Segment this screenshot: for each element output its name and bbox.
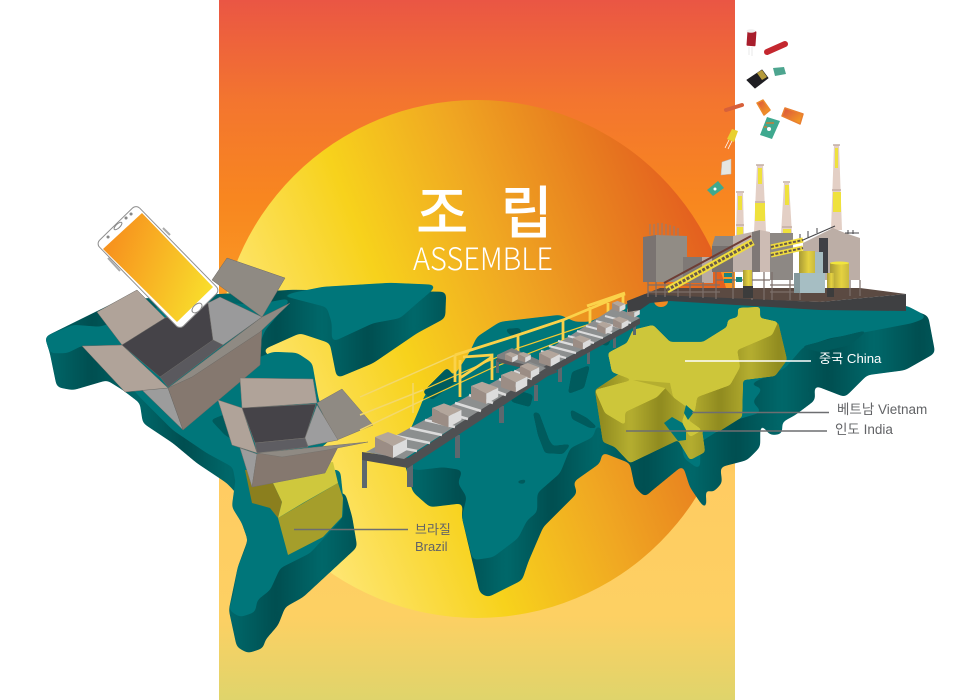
front flap [257, 442, 368, 457]
brazil text: 브라질 [415, 522, 451, 537]
background panel [219, 0, 735, 700]
phone screen [103, 213, 213, 322]
inner bottom [160, 340, 223, 387]
building low [683, 257, 702, 283]
belt segment 2 slats [541, 316, 631, 358]
stilts [648, 272, 860, 300]
india side wall [595, 322, 787, 463]
brazil leader line [294, 528, 408, 530]
red rod [767, 44, 785, 52]
brazil text english: Brazil [415, 539, 448, 554]
building centre right [770, 233, 793, 280]
belt segment 1 frame [362, 364, 558, 468]
teal windows [724, 273, 742, 283]
brazil highlight [245, 462, 343, 555]
label: brazil [294, 522, 451, 554]
americas side walls [45, 290, 446, 497]
back right flap [212, 258, 285, 317]
building left [643, 235, 656, 282]
yellow capacitor [725, 129, 738, 149]
white component [721, 159, 731, 175]
canada top [273, 283, 437, 342]
red capacitor [746, 29, 756, 56]
phone body [96, 205, 220, 329]
outside front [252, 447, 338, 487]
back left flap [97, 290, 165, 345]
inner right wall [208, 297, 262, 345]
china india vietnam highlight [595, 307, 787, 463]
china top [595, 307, 778, 437]
india leader line [626, 430, 827, 432]
inland dark patches [423, 328, 612, 484]
inner back wall [122, 303, 213, 377]
blue block front [794, 273, 825, 293]
front right flap [168, 303, 290, 388]
gulf dark patch [211, 408, 250, 450]
phone camera dots [108, 214, 131, 237]
belt segment 1 surface [366, 362, 546, 459]
vietnam inlet [684, 405, 694, 420]
phone earpiece [113, 221, 123, 231]
eurasia africa side walls [403, 300, 935, 597]
thick rails and posts [455, 293, 625, 397]
sun circle [218, 100, 736, 618]
platform front [627, 294, 906, 312]
roof rails [800, 226, 859, 242]
persian gulf dark [570, 409, 598, 428]
cardboard box large [82, 258, 290, 430]
front left flap [82, 345, 168, 392]
title [413, 168, 561, 279]
outside front [168, 328, 262, 430]
tower [752, 230, 760, 272]
blue block back [815, 252, 823, 273]
cardboard box small [218, 378, 373, 487]
title korean: 조 립 [416, 168, 561, 250]
gulf dark sliver [533, 412, 571, 454]
right flap [317, 389, 373, 440]
tank right [830, 263, 849, 288]
small pcb lower [707, 181, 724, 196]
building right [803, 228, 860, 280]
belt segment 1 slats [381, 371, 532, 451]
south america side wall [229, 493, 357, 653]
china leader line [685, 360, 811, 362]
eurasia africa top [403, 298, 928, 560]
world map land [45, 283, 935, 653]
south america top [229, 470, 343, 617]
brazil dark side [245, 470, 282, 518]
small pcb [773, 67, 786, 76]
outside left [142, 388, 183, 430]
building middle [712, 236, 733, 246]
conveyor truss small [771, 240, 803, 255]
smokestacks [736, 145, 842, 236]
large pcb [760, 117, 780, 139]
falling electronic components [707, 29, 803, 196]
brazil front side [278, 483, 343, 555]
orange cylinder [782, 108, 803, 124]
antennas [650, 223, 678, 236]
vietnam text: 베트남 Vietnam [837, 402, 927, 417]
faded rail section [360, 355, 455, 430]
northeast dark bay [800, 330, 868, 352]
curve segment [497, 348, 548, 373]
back flap [240, 378, 317, 408]
boxes on conveyor [375, 301, 640, 458]
thin rails [423, 318, 608, 400]
inner back wall [242, 404, 316, 443]
inner right wall [305, 405, 338, 446]
tank large back [799, 251, 815, 273]
inner bottom [255, 438, 308, 453]
tank small right [827, 273, 834, 288]
brazil top [270, 462, 338, 518]
vietnam leader line [692, 412, 829, 414]
india text: 인도 India [835, 422, 893, 437]
white mask right of panel [735, 0, 960, 500]
conveyor legs [362, 322, 636, 488]
teal gap under india [664, 417, 686, 441]
smartphone [96, 205, 220, 329]
china text: 중국 China [819, 351, 882, 366]
north america top [45, 298, 330, 490]
yellow railings [360, 293, 625, 430]
title english: ASSEMBLE [413, 234, 553, 279]
platform top [640, 288, 906, 302]
orange capsule [757, 100, 770, 115]
outside left [240, 448, 257, 487]
factory [627, 145, 906, 312]
conveyor belts [362, 301, 640, 488]
memory card [747, 70, 768, 88]
left flap [218, 400, 257, 453]
phone side buttons [108, 228, 170, 271]
conveyor truss big [664, 236, 753, 290]
belt segment 2 frame [548, 318, 640, 375]
belt segment 2 surface [540, 307, 640, 368]
china shoulder shadow [633, 380, 673, 397]
phone home button [190, 301, 204, 315]
small yellow tank [743, 270, 752, 286]
orange rod [726, 105, 742, 110]
orange notch under platform [654, 295, 668, 307]
